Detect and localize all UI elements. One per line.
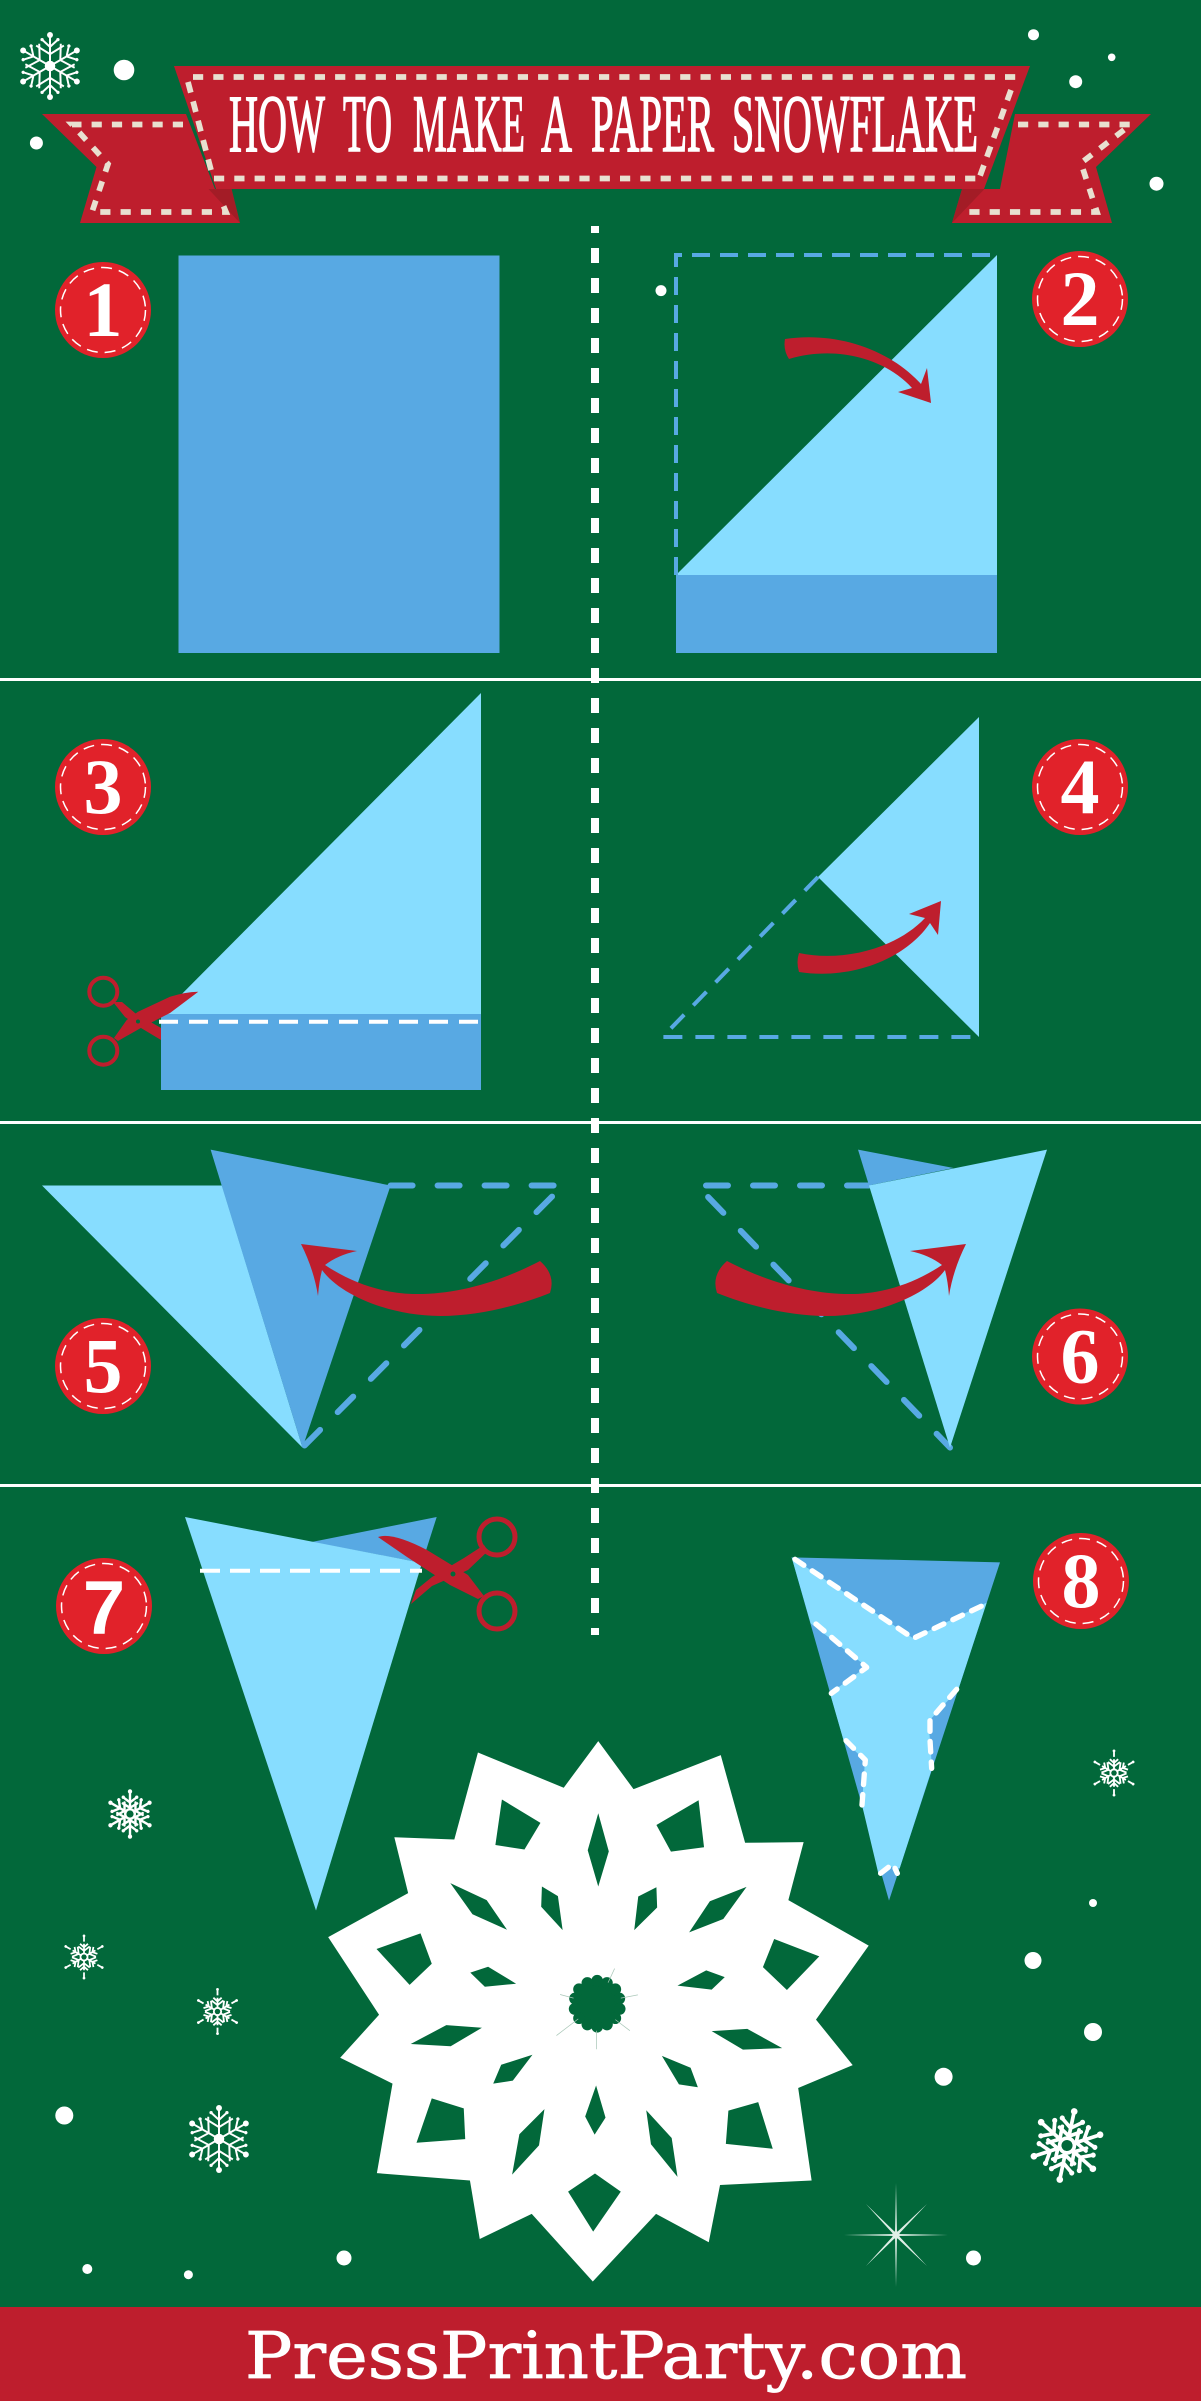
banner right tail xyxy=(952,114,1151,223)
badge 6 xyxy=(1032,1308,1128,1404)
icon: snowflake right large xyxy=(1020,2100,1114,2191)
badge 2 xyxy=(1032,251,1128,347)
badge 2: 2 xyxy=(1060,255,1100,342)
scissors xyxy=(89,978,198,1065)
light paper xyxy=(42,1186,302,1448)
full sheet of paper xyxy=(178,256,500,653)
banner centre xyxy=(174,66,1030,189)
badge 8: 8 xyxy=(1062,1537,1100,1624)
banner right fold xyxy=(952,189,984,223)
finished paper snowflake xyxy=(328,1741,869,2282)
dashed outline xyxy=(697,1186,950,1448)
folded triangle xyxy=(676,255,997,575)
panel: step 2 xyxy=(676,251,1128,653)
title: HOW xyxy=(229,78,325,169)
badge 3 xyxy=(55,739,151,835)
title xyxy=(229,78,978,169)
banner stitching xyxy=(72,77,1131,212)
dashed outline xyxy=(662,877,979,1037)
light cut shape xyxy=(792,1557,987,1873)
badge 5 xyxy=(55,1318,151,1414)
icon: snowflake left 3 xyxy=(194,1988,241,2035)
dashed outline xyxy=(302,1186,563,1448)
bottom strip xyxy=(161,1014,481,1090)
panel: step 6 xyxy=(697,1150,1128,1448)
cut cone paper xyxy=(792,1557,1000,1901)
panel: step 3 xyxy=(55,693,481,1090)
badge 1 xyxy=(55,262,151,358)
title banner xyxy=(42,66,1151,223)
title: MAKE xyxy=(413,78,525,169)
panel: step 4 xyxy=(662,717,1128,1037)
badge 4 xyxy=(1032,739,1128,835)
badge 8 xyxy=(1033,1533,1129,1629)
snowflake body with cut-outs xyxy=(328,1741,869,2282)
white dashed cut line xyxy=(159,1020,481,1024)
bottom strip of paper xyxy=(676,575,997,653)
sparkle xyxy=(844,2183,948,2287)
dashed fold outline xyxy=(676,255,997,575)
white dashed cut lines xyxy=(795,1559,986,1873)
dark flap xyxy=(312,1517,437,1563)
badge 1: 1 xyxy=(84,266,122,353)
snowflake centre hole xyxy=(569,1975,626,2033)
section rule lines xyxy=(0,678,1201,1487)
badge 7 xyxy=(56,1558,152,1654)
panel: step 7 xyxy=(56,1517,515,1910)
banner left tail xyxy=(42,114,240,223)
icon: snowflake left 4 xyxy=(183,2105,255,2173)
dark flap behind xyxy=(858,1150,954,1186)
banner left fold xyxy=(208,189,240,223)
light cone xyxy=(185,1517,422,1910)
light folded paper xyxy=(869,1150,1047,1448)
arrow: fold xyxy=(784,337,931,403)
arrow: fold left xyxy=(301,1244,552,1316)
icon: snowflake left 1 xyxy=(104,1789,156,1839)
badge 3: 3 xyxy=(84,743,122,830)
badge 6: 6 xyxy=(1060,1312,1100,1400)
title: TO xyxy=(343,78,392,169)
title: PAPER xyxy=(591,78,714,169)
badge 5: 5 xyxy=(84,1322,122,1409)
icon: snowflake left 2 xyxy=(62,1935,106,1979)
icon: snowflake top left xyxy=(14,32,86,100)
centre dashed divider xyxy=(591,226,599,1635)
panel: step 1 xyxy=(55,256,500,653)
footer text: PressPrintParty.com xyxy=(245,2319,967,2394)
title: A xyxy=(541,78,572,169)
badge 7: 7 xyxy=(83,1566,125,1651)
arrow: fold right xyxy=(715,1244,966,1316)
panel: step 5 xyxy=(42,1150,563,1448)
triangle xyxy=(162,693,481,1014)
white dashed cut line xyxy=(200,1569,422,1573)
dark base triangle xyxy=(792,1557,1000,1901)
arrow: fold xyxy=(798,901,941,974)
folded paper xyxy=(818,717,979,1037)
icon: snowflake right small xyxy=(1091,1750,1137,1796)
panel: step 8 xyxy=(792,1533,1129,1901)
scissors xyxy=(378,1519,515,1629)
snowflake centre slits xyxy=(556,1969,638,2049)
footer band xyxy=(0,2307,1201,2401)
folded dark flap xyxy=(211,1150,391,1448)
badge 4: 4 xyxy=(1060,743,1100,830)
